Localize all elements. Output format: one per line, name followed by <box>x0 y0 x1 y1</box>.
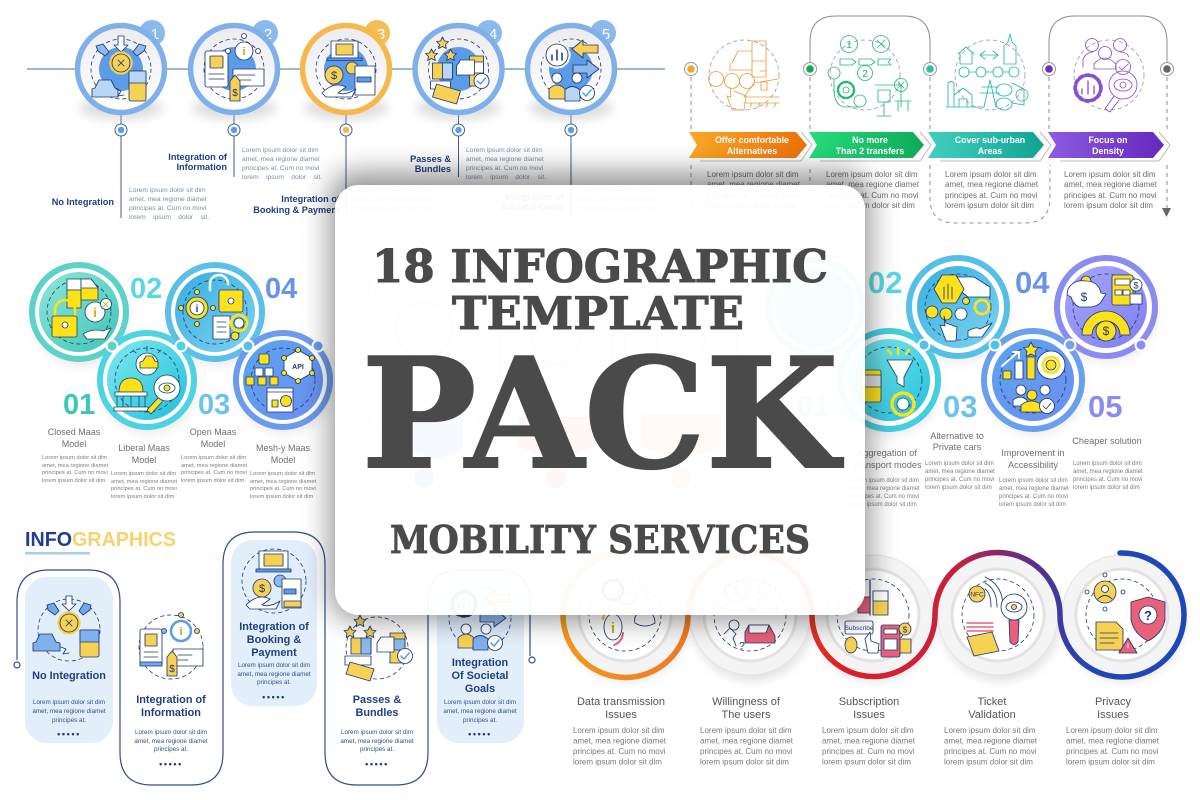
card 3: integration of booking and payment: principes at. <box>257 679 291 686</box>
circle: faded first benefit <box>768 260 862 354</box>
number 04: 04 <box>1015 265 1050 300</box>
card 5: integration of societal goals: Integration <box>452 657 508 669</box>
text: passes and bundles: Passes & <box>410 154 451 164</box>
arrow: focus on density <box>1048 132 1170 161</box>
text: integration of booking and payment <box>253 187 432 215</box>
step 5 circle: 5 <box>602 26 610 43</box>
text: cheaper solution: amet, mea regione diamet <box>1073 469 1143 475</box>
icon: societal goals <box>449 587 511 650</box>
circle: cheaper solution <box>1057 258 1157 362</box>
card 5: integration of societal goals: principes at. <box>463 717 497 724</box>
card 1: no integration: principes at. <box>52 717 86 724</box>
icon: booking and payment: $ <box>331 70 337 82</box>
text: open maas model: principes at. Cum no movi <box>181 470 247 476</box>
card 3: integration of booking and payment: Payment <box>251 647 297 659</box>
text: improvement in accessibility: Lorem ipsum dolor sit dim <box>999 478 1068 484</box>
text: passes and bundles: amet, mea regione diamet <box>466 156 544 163</box>
text: data transmission issues: principes at. Cum no movi <box>573 747 666 756</box>
icon: no more than 2 transfers: 2 <box>862 69 868 80</box>
circle: aggregation of transport modes <box>840 331 940 435</box>
panel: Maas models linked circles <box>32 265 333 500</box>
card 3: integration of booking and payment: amet, mea regione diamet <box>237 671 311 678</box>
text: data transmission issues: Issues <box>605 709 637 721</box>
text: passes and bundles <box>410 147 546 181</box>
text: integration of information: Lorem ipsum dolor sit dim <box>242 147 319 154</box>
text: subscription issues: Subscription <box>839 696 899 708</box>
card 5: integration of societal goals: ••••• <box>468 729 492 739</box>
text: improvement in accessibility: Improvement in <box>1001 448 1065 458</box>
card 3: integration of booking and payment: Booking & <box>247 634 301 646</box>
text: liberal maas model: Model <box>132 455 156 465</box>
icon: privacy issues: ? <box>1144 608 1152 623</box>
text: data transmission issues: amet, mea regione diamet <box>573 736 667 746</box>
icon: mesh-y maas <box>246 348 314 412</box>
text: cheaper solution: Lorem ipsum dolor sit dim <box>1073 461 1142 467</box>
text: willingness of the users: amet, mea regione diamet <box>700 736 794 746</box>
text: aggregation of transport modes: amet, mea regione diamet <box>850 486 920 492</box>
title: template: TEMPLATE <box>452 287 744 340</box>
text: subscription issues: principes at. Cum no movi <box>822 747 915 756</box>
arrow: cover sub-urban areas: Cover sub-urban <box>955 135 1025 145</box>
step 1 circle: 1 <box>151 26 159 43</box>
arrow: down end marker <box>1162 208 1171 217</box>
text: integration of societal goals: amet, mea regione diamet <box>579 196 657 203</box>
icon: integration of information: $ <box>232 88 238 99</box>
card 4: passes and bundles: amet, mea regione diamet <box>340 738 414 745</box>
text: closed maas model: principes at. Cum no movi <box>42 470 108 476</box>
card 1: no integration: No Integration <box>32 670 106 682</box>
text: integration of information: Information <box>176 162 227 172</box>
text: liberal maas model: amet, mea regione diamet <box>111 479 177 485</box>
text: closed maas model: lorem ipsum dolor sit dim <box>42 478 105 484</box>
number 03: 03 <box>943 389 977 424</box>
text: aggregation of transport modes <box>850 448 922 508</box>
card 2: integration of information: Information <box>141 707 201 719</box>
text: passes and bundles: Lorem ipsum dolor sit dim <box>466 147 543 154</box>
text: subscription issues: lorem ipsum dolor sit dim <box>822 758 911 766</box>
text: integration of information: Integration of <box>168 152 228 162</box>
text: ticket validation <box>944 696 1038 766</box>
icon: integration of information <box>205 34 264 101</box>
text: integration of societal goals: principes at. Cum no movi <box>579 205 657 212</box>
text: closed maas model <box>42 427 108 484</box>
text: integration of booking and payment: Integration of <box>281 194 341 204</box>
text: process descriptions: lorem ipsum dolor sit dim <box>945 201 1034 210</box>
arrow: focus on density: Density <box>1092 146 1124 156</box>
icon: closed maas <box>52 279 112 339</box>
icon: no more than 2 transfers <box>828 36 911 116</box>
text: open maas model: lorem ipsum dolor sit dim <box>181 478 244 484</box>
icon: sub-urban areas <box>946 34 1028 110</box>
text: liberal maas model: Liberal Maas <box>118 443 170 453</box>
text: improvement in accessibility <box>999 448 1069 508</box>
circle: liberal maas model <box>100 333 197 434</box>
arrow: offer comfortable alternatives: Alternatives <box>727 146 777 156</box>
icon: societal goals <box>545 40 599 101</box>
text: integration of societal goals: Integration of <box>505 192 565 202</box>
text: closed maas model: Model <box>62 439 86 449</box>
icon: aggregation <box>861 348 914 415</box>
text: process descriptions: lorem ipsum dolor sit dim <box>1064 201 1153 210</box>
text: mesh-y maas model: lorem ipsum dolor sit dim <box>250 494 313 500</box>
text: privacy issues: lorem ipsum dolor sit dim <box>1066 758 1155 766</box>
circle: mesh-y maas model <box>236 333 333 434</box>
text: no integration: principes at. Cum no movi <box>129 205 207 212</box>
text: improvement in accessibility: Accessibility <box>1008 460 1058 470</box>
card 2: integration of information: principes at. <box>154 746 188 753</box>
arrow: cover sub-urban areas <box>928 132 1051 161</box>
arrow: offer comfortable alternatives <box>689 132 812 161</box>
text: alternative to private cars: amet, mea regione diamet <box>925 469 995 475</box>
text: integration of booking and payment: Booking & Payment <box>253 205 340 215</box>
title: 18 infographic: 18 INFOGRAPHIC <box>372 240 828 293</box>
panel: integration cards with serpentine outline <box>14 529 535 785</box>
text: alternative to private cars: Alternative to <box>930 431 984 441</box>
card 4: passes and bundles: Bundles <box>356 707 398 719</box>
card 5: integration of societal goals: Of Societal <box>452 670 508 682</box>
icon: no more than 2 transfers: 1 <box>846 40 852 51</box>
text: process descriptions: amet, mea regione diamet <box>707 180 801 189</box>
text: integration of information: principes at. Cum no movi <box>242 165 320 172</box>
text: passes and bundles: lorem ipsum dolor sit. <box>466 174 546 181</box>
text: alternative to private cars <box>925 431 995 491</box>
text: integration of information: lorem ipsum dolor sit. <box>242 174 322 181</box>
text: ticket validation: Lorem ipsum dolor sit dim <box>944 726 1036 735</box>
icon: liberal maas <box>114 346 180 414</box>
text: liberal maas model: lorem ipsum dolor sit dim <box>111 494 174 500</box>
step 3 circle <box>302 20 390 120</box>
text: process descriptions <box>707 170 1158 210</box>
number 02: 02 <box>868 265 902 300</box>
text: integration of booking and payment: Lorem ipsum dolor sit dim <box>354 187 431 194</box>
icon: privacy issues <box>1085 573 1165 653</box>
text: subscription issues: Issues <box>853 709 885 721</box>
text: willingness of the users: lorem ipsum dolor sit dim <box>700 758 789 766</box>
icon: integration of information: $ <box>169 664 175 675</box>
icon: no integration <box>33 596 100 661</box>
text: willingness of the users: Lorem ipsum dolor sit dim <box>700 726 792 735</box>
card 4: passes and bundles: Lorem ipsum dolor sit dim <box>341 729 413 736</box>
number 01 faded: 01 <box>797 391 829 423</box>
icon: willingness of the users <box>714 579 786 652</box>
text: subscription issues: Lorem ipsum dolor sit dim <box>822 726 914 735</box>
text: process descriptions: Lorem ipsum dolor sit dim <box>707 170 799 179</box>
text: no integration: amet, mea regione diamet <box>129 196 207 203</box>
text: open maas model: Lorem ipsum dolor sit dim <box>181 455 246 461</box>
text: liberal maas model: Lorem ipsum dolor sit dim <box>111 471 176 477</box>
text: privacy issues: Privacy <box>1095 696 1132 708</box>
icon: closed maas: i <box>93 305 97 320</box>
text: mesh-y maas model <box>250 443 316 500</box>
icon: cheaper solution: $ <box>1081 290 1088 304</box>
text: open maas model: Model <box>201 439 225 449</box>
text: ticket validation: amet, mea regione diamet <box>944 736 1038 746</box>
text: no integration: No Integration <box>52 197 114 207</box>
icon: comfortable alternatives <box>708 40 779 110</box>
text: closed maas model: amet, mea regione diamet <box>42 463 108 469</box>
text: subscription issues: amet, mea regione diamet <box>822 736 916 746</box>
text: data transmission issues: Lorem ipsum dolor sit dim <box>573 726 665 735</box>
text: open maas model: Open Maas <box>190 427 237 437</box>
panel: benefits linked circles <box>768 258 1157 508</box>
step 2 circle: 2 <box>264 26 272 43</box>
text: privacy issues: principes at. Cum no movi <box>1066 747 1159 756</box>
step 1 circle <box>78 20 165 120</box>
text: willingness of the users: The users <box>722 709 771 721</box>
text: no integration <box>52 187 209 221</box>
text: data transmission issues: lorem ipsum dolor sit dim <box>573 758 662 766</box>
step 4 circle <box>415 20 502 120</box>
panel: issues ring chain <box>563 552 1184 766</box>
text: privacy issues <box>1066 696 1160 766</box>
panel: arrow process with four steps <box>684 16 1174 223</box>
text: aggregation of transport modes: Aggregation of <box>857 448 917 458</box>
icon: cheaper solution: $ <box>1103 324 1110 338</box>
text: improvement in accessibility: principes at. Cum no movi <box>999 494 1068 500</box>
text: mesh-y maas model: Lorem ipsum dolor sit dim <box>250 471 315 477</box>
text: open maas model <box>181 427 247 484</box>
card 1: no integration: ••••• <box>57 729 81 739</box>
number 01: 01 <box>63 389 95 421</box>
text: willingness of the users: principes at. Cum no movi <box>700 747 793 756</box>
card 4: passes and bundles: ••••• <box>365 759 389 769</box>
text: mesh-y maas model: Model <box>271 455 295 465</box>
number 03: 03 <box>198 389 230 421</box>
icon: booking and payment: $ <box>259 583 265 595</box>
card 2: integration of information: Integration of <box>136 694 206 706</box>
number 02: 02 <box>130 273 162 305</box>
arrow: no more than 2 transfers: Than 2 transfers <box>836 146 904 156</box>
text: process descriptions: lorem ipsum dolor sit dim <box>707 201 796 210</box>
text: passes and bundles: principes at. Cum no movi <box>466 165 544 172</box>
connector dots <box>106 340 324 352</box>
step 3 circle: 3 <box>377 26 385 43</box>
text: cheaper solution: lorem ipsum dolor sit dim <box>1073 485 1140 491</box>
serpentine gradient ring <box>563 552 1184 678</box>
text: no integration: Lorem ipsum dolor sit dim <box>129 187 206 194</box>
card 1: no integration: Lorem ipsum dolor sit dim <box>33 699 105 706</box>
text: data transmission issues <box>573 696 667 766</box>
text: process descriptions: principes at. Cum no movi <box>826 191 919 200</box>
icon: data transmission <box>589 579 661 651</box>
text: aggregation of transport modes: Transport modes <box>852 460 922 470</box>
text: privacy issues: Lorem ipsum dolor sit dim <box>1066 726 1158 735</box>
card 2: integration of information: amet, mea regione diamet <box>134 738 208 745</box>
card 3: integration of booking and payment: Lorem ipsum dolor sit dim <box>238 662 310 669</box>
icon: passes and bundles <box>426 37 489 104</box>
number 05: 05 <box>1088 389 1122 424</box>
icon: data transmission: ? <box>624 590 630 602</box>
text: process descriptions: amet, mea regione diamet <box>945 180 1039 189</box>
text: ticket validation: Validation <box>968 709 1016 721</box>
text: aggregation of transport modes: Lorem ipsum dolor sit dim <box>850 478 919 484</box>
text: aggregation of transport modes: principes at. Cum no movi <box>850 494 919 500</box>
text: open maas model: amet, mea regione diamet <box>181 463 247 469</box>
text: liberal maas model <box>111 443 177 500</box>
text: cheaper solution: principes at. Cum no movi <box>1073 477 1142 483</box>
arrow: cover sub-urban areas: Areas <box>978 146 1002 156</box>
icon: integration of information: i <box>179 626 183 638</box>
text: willingness of the users <box>700 696 794 766</box>
circle: alternative to private cars <box>909 258 1009 362</box>
icon: open maas <box>178 275 247 340</box>
text: integration of information: amet, mea regione diamet <box>242 156 320 163</box>
card 5: integration of societal goals: Goals <box>465 683 495 695</box>
title card shadow <box>330 172 870 620</box>
subtitle: mobility services: MOBILITY SERVICES <box>390 517 810 562</box>
icon: subscription issues <box>837 579 911 657</box>
text: process descriptions: amet, mea regione diamet <box>1064 180 1158 189</box>
icon: booking and payment <box>242 549 306 613</box>
text: improvement in accessibility: lorem ipsum dolor sit dim <box>999 502 1066 508</box>
text: integration of societal goals: Lorem ipsum dolor sit dim <box>579 187 656 194</box>
card 4: passes and bundles <box>340 615 414 769</box>
card 1: no integration <box>32 596 106 739</box>
arrow: no more than 2 transfers: No more <box>852 135 888 145</box>
connector dots <box>918 340 1146 350</box>
icon: willingness of the users: ? <box>754 595 762 610</box>
card 2: integration of information <box>134 612 208 769</box>
icon: focus on density <box>1074 38 1144 112</box>
text: integration of booking and payment: principes at. Cum no movi <box>354 205 432 212</box>
text: process descriptions: amet, mea regione diamet <box>826 180 920 189</box>
card 3: integration of booking and payment: Integration of <box>239 621 309 633</box>
icon: open maas: i <box>196 304 199 315</box>
title: pack: PACK <box>362 324 843 503</box>
text: process descriptions: Lorem ipsum dolor sit dim <box>826 170 918 179</box>
text: improvement in accessibility: amet, mea regione diamet <box>999 486 1069 492</box>
icon: subscription issues: $ <box>903 626 908 634</box>
serpentine outline <box>14 532 535 785</box>
text: mesh-y maas model: Mesh-y Maas <box>256 443 311 453</box>
card pads <box>25 540 524 743</box>
icon: mesh-y maas: API <box>292 364 304 371</box>
card 2: integration of information: Lorem ipsum dolor sit dim <box>135 729 207 736</box>
text: subscription issues <box>822 696 916 766</box>
icon: cheaper solution <box>1067 275 1142 341</box>
step 2 circle <box>190 20 278 120</box>
arrow: offer comfortable alternatives: Offer comfortable <box>715 135 789 145</box>
text: ticket validation: Ticket <box>978 696 1006 708</box>
text: process descriptions: principes at. Cum no movi <box>945 191 1038 200</box>
text: integration of booking and payment: amet, mea regione diamet <box>354 196 432 203</box>
text: cheaper solution: Cheaper solution <box>1072 436 1142 446</box>
card 3: integration of booking and payment <box>237 549 311 702</box>
card 3: integration of booking and payment: ••••• <box>262 692 286 702</box>
card 2: integration of information: ••••• <box>159 759 183 769</box>
panel: template hidden behind the title card <box>368 270 737 488</box>
process frames <box>691 16 1167 223</box>
circle: open maas model <box>168 265 265 366</box>
text: alternative to private cars: principes at. Cum no movi <box>925 477 994 483</box>
number 04: 04 <box>265 273 297 305</box>
card 5: integration of societal goals: amet, mea regione diamet <box>443 708 517 715</box>
text: passes and bundles: Bundles <box>415 164 451 174</box>
text: alternative to private cars: Private cars <box>933 442 982 452</box>
icon: alternative to private cars <box>926 275 992 341</box>
text: closed maas model: Lorem ipsum dolor sit dim <box>42 455 107 461</box>
text: alternative to private cars: Lorem ipsum dolor sit dim <box>925 461 994 467</box>
text: liberal maas model: principes at. Cum no movi <box>111 486 177 492</box>
icon: data transmission: i <box>611 620 615 637</box>
text: process descriptions: Lorem ipsum dolor sit dim <box>1064 170 1156 179</box>
text: aggregation of transport modes: lorem ipsum dolor sit dim <box>850 502 917 508</box>
process nodes <box>684 62 1174 76</box>
text: process descriptions: Lorem ipsum dolor sit dim <box>945 170 1037 179</box>
icon: ticket validation: NFC <box>970 592 984 598</box>
step 4 circle: 4 <box>489 26 497 43</box>
timeline nodes <box>115 124 577 136</box>
text: process descriptions: lorem ipsum dolor sit dim <box>826 201 915 210</box>
icon: integration of information <box>139 612 203 679</box>
card 1: no integration: amet, mea regione diamet <box>32 708 106 715</box>
card 5: integration of societal goals <box>443 587 517 739</box>
panel: title card <box>335 185 865 615</box>
text: willingness of the users: Willingness of <box>712 696 781 708</box>
text: process descriptions: principes at. Cum no movi <box>1064 191 1157 200</box>
text: no integration: lorem ipsum dolor sit. <box>129 214 209 221</box>
text: closed maas model: Closed Maas <box>48 427 101 437</box>
card 4: passes and bundles: Passes & <box>353 694 401 706</box>
text: mesh-y maas model: principes at. Cum no movi <box>250 486 316 492</box>
icon: subscription issues: Subscribe <box>845 625 874 632</box>
text: ticket validation: principes at. Cum no movi <box>944 747 1037 756</box>
arrow: no more than 2 transfers <box>809 132 931 161</box>
icon: willingness of the users: ? <box>739 641 745 652</box>
icon: improvement in accessibility <box>1002 342 1065 414</box>
text: privacy issues: Issues <box>1097 709 1129 721</box>
text: ticket validation: lorem ipsum dolor sit dim <box>944 758 1033 766</box>
card 5: integration of societal goals: Lorem ipsum dolor sit dim <box>444 699 516 706</box>
icon: ticket validation <box>962 577 1034 656</box>
text: alternative to private cars: lorem ipsum dolor sit dim <box>925 485 992 491</box>
text: mesh-y maas model: amet, mea regione diamet <box>250 479 316 485</box>
icon: integration of information: i <box>242 46 246 58</box>
icon: cheaper solution: $ <box>1133 280 1139 290</box>
icon: no integration <box>92 36 146 101</box>
text: process descriptions: principes at. Cum no movi <box>707 191 800 200</box>
text: integration of societal goals <box>501 187 657 212</box>
text: data transmission issues: Data transmission <box>577 696 665 708</box>
text: integration of societal goals: Societal Goals <box>501 202 564 212</box>
arrow: focus on density: Focus on <box>1088 135 1128 145</box>
step 5 circle <box>528 20 616 120</box>
circle: improvement in accessibility <box>984 331 1084 435</box>
circle: closed maas model <box>32 265 129 366</box>
icon: passes and bundles <box>344 615 412 681</box>
card 4: passes and bundles: principes at. <box>360 746 394 753</box>
ring discs <box>565 555 1184 681</box>
text: cheaper solution <box>1072 436 1143 491</box>
icon: booking and payment <box>322 41 375 97</box>
text: integration of information <box>168 147 322 181</box>
heading: infographics: INFOGRAPHICS <box>25 529 176 551</box>
text: privacy issues: amet, mea regione diamet <box>1066 736 1160 746</box>
panel: horizontal timeline with five numbered circles <box>27 20 665 221</box>
